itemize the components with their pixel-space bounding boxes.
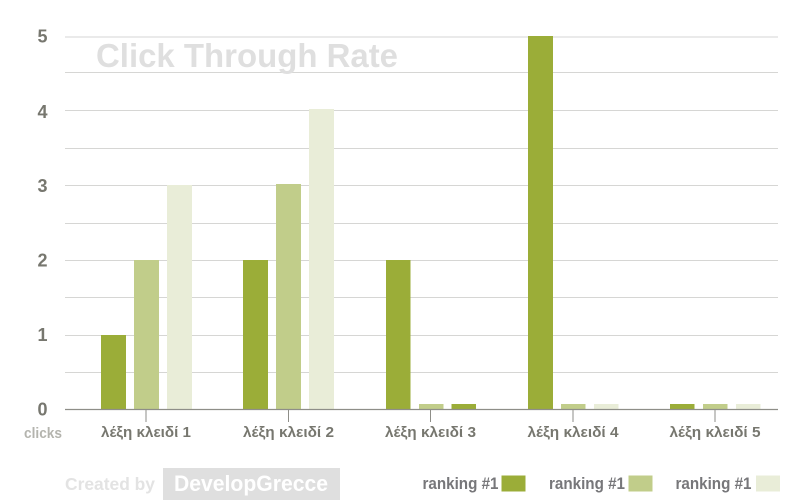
x axis labels: λέξη κλειδί 1 xyxy=(101,424,191,441)
x axis labels: λέξη κλειδί 4 xyxy=(528,424,619,441)
bars: λέξη κλειδί 3 xyxy=(386,260,476,410)
y axis labels: 0 xyxy=(37,400,48,420)
y axis labels: 2 xyxy=(37,250,48,270)
title: Click Through Rate xyxy=(96,38,398,75)
y axis labels xyxy=(37,26,48,420)
x axis xyxy=(65,410,778,422)
y axis labels: 4 xyxy=(37,102,48,122)
y axis labels: 3 xyxy=(37,176,48,196)
legend: ranking #1 xyxy=(676,475,752,493)
created by credit: Created by xyxy=(65,474,155,494)
created by credit xyxy=(65,468,340,500)
y axis unit label: clicks xyxy=(24,425,62,442)
x axis labels: λέξη κλειδί 3 xyxy=(385,424,476,441)
bars: λέξη κλειδί 4 xyxy=(528,36,618,410)
x axis labels: λέξη κλειδί 2 xyxy=(243,424,334,441)
created by credit: DevelopGrecce xyxy=(174,471,328,496)
x axis labels: λέξη κλειδί 5 xyxy=(670,424,760,441)
y axis labels: 1 xyxy=(37,325,48,345)
x axis labels xyxy=(101,424,760,441)
y axis labels: 5 xyxy=(37,26,48,46)
bars: λέξη κλειδί 1 xyxy=(101,185,192,410)
legend: ranking #1 xyxy=(422,475,498,493)
legend: ranking #1 xyxy=(549,475,625,493)
bars: λέξη κλειδί 2 xyxy=(243,109,334,410)
legend xyxy=(422,475,780,493)
bars: λέξη κλειδί 5 xyxy=(670,404,760,410)
